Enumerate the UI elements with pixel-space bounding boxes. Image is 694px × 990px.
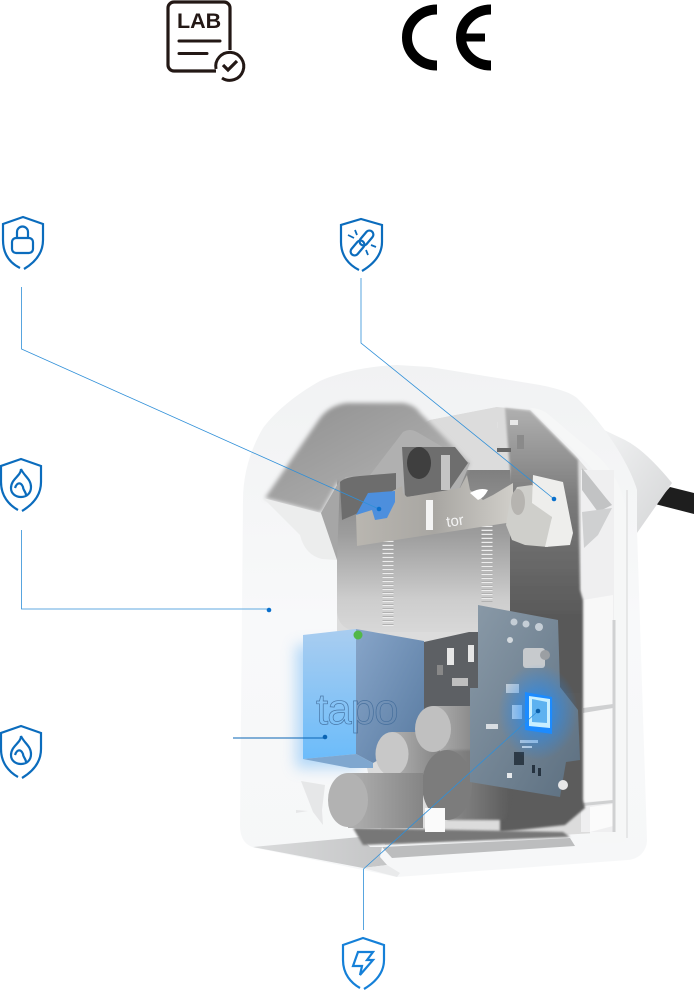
callout: flame shield upper [1,459,271,612]
icon: shield with padlock [3,217,43,269]
device: cutaway smart plug [240,365,694,877]
rear plug housing and cable [600,428,694,533]
metal contact bar [356,475,513,546]
blue block relay [296,629,424,768]
right white shell wall with ribs [530,408,627,843]
leader line [364,711,538,930]
interior cavity [337,407,613,845]
icon: lab report certificate: LAB [177,9,221,33]
main circuit board [470,605,580,797]
plug body shell [240,365,647,877]
callout: flame shield lower [1,726,327,778]
icon: shield with flame [1,459,41,511]
capacitors [328,706,512,832]
dark lip at base [353,828,570,845]
leader line [22,530,269,609]
socket recess [263,403,470,560]
translucent top section [430,407,497,465]
blue latch [356,491,395,520]
leader line [22,287,379,509]
springs [388,525,487,628]
blue block relay: tapo [316,685,398,734]
callout: lock shield [3,217,381,511]
socket inner plate [340,473,396,520]
leader line [233,737,325,739]
bottom facet of shell [253,837,387,868]
icon: shield with lightning bolt [343,938,384,989]
icon: CE mark [407,10,491,66]
metal contact bar: tor [445,512,465,531]
rear wall tabs [582,468,612,548]
icon: lab report certificate [168,2,244,80]
callout: lightning bolt shield [343,709,540,989]
callout: broken link shield [341,219,556,501]
icon: shield with broken chain link [341,219,382,271]
rear circuit board [424,408,585,832]
glowing chip [498,664,578,760]
right metal clip [506,475,573,547]
inner rear panel [337,470,510,632]
leader line [361,278,554,499]
bright front shards [296,781,325,825]
icon: shield with flame [1,726,41,778]
